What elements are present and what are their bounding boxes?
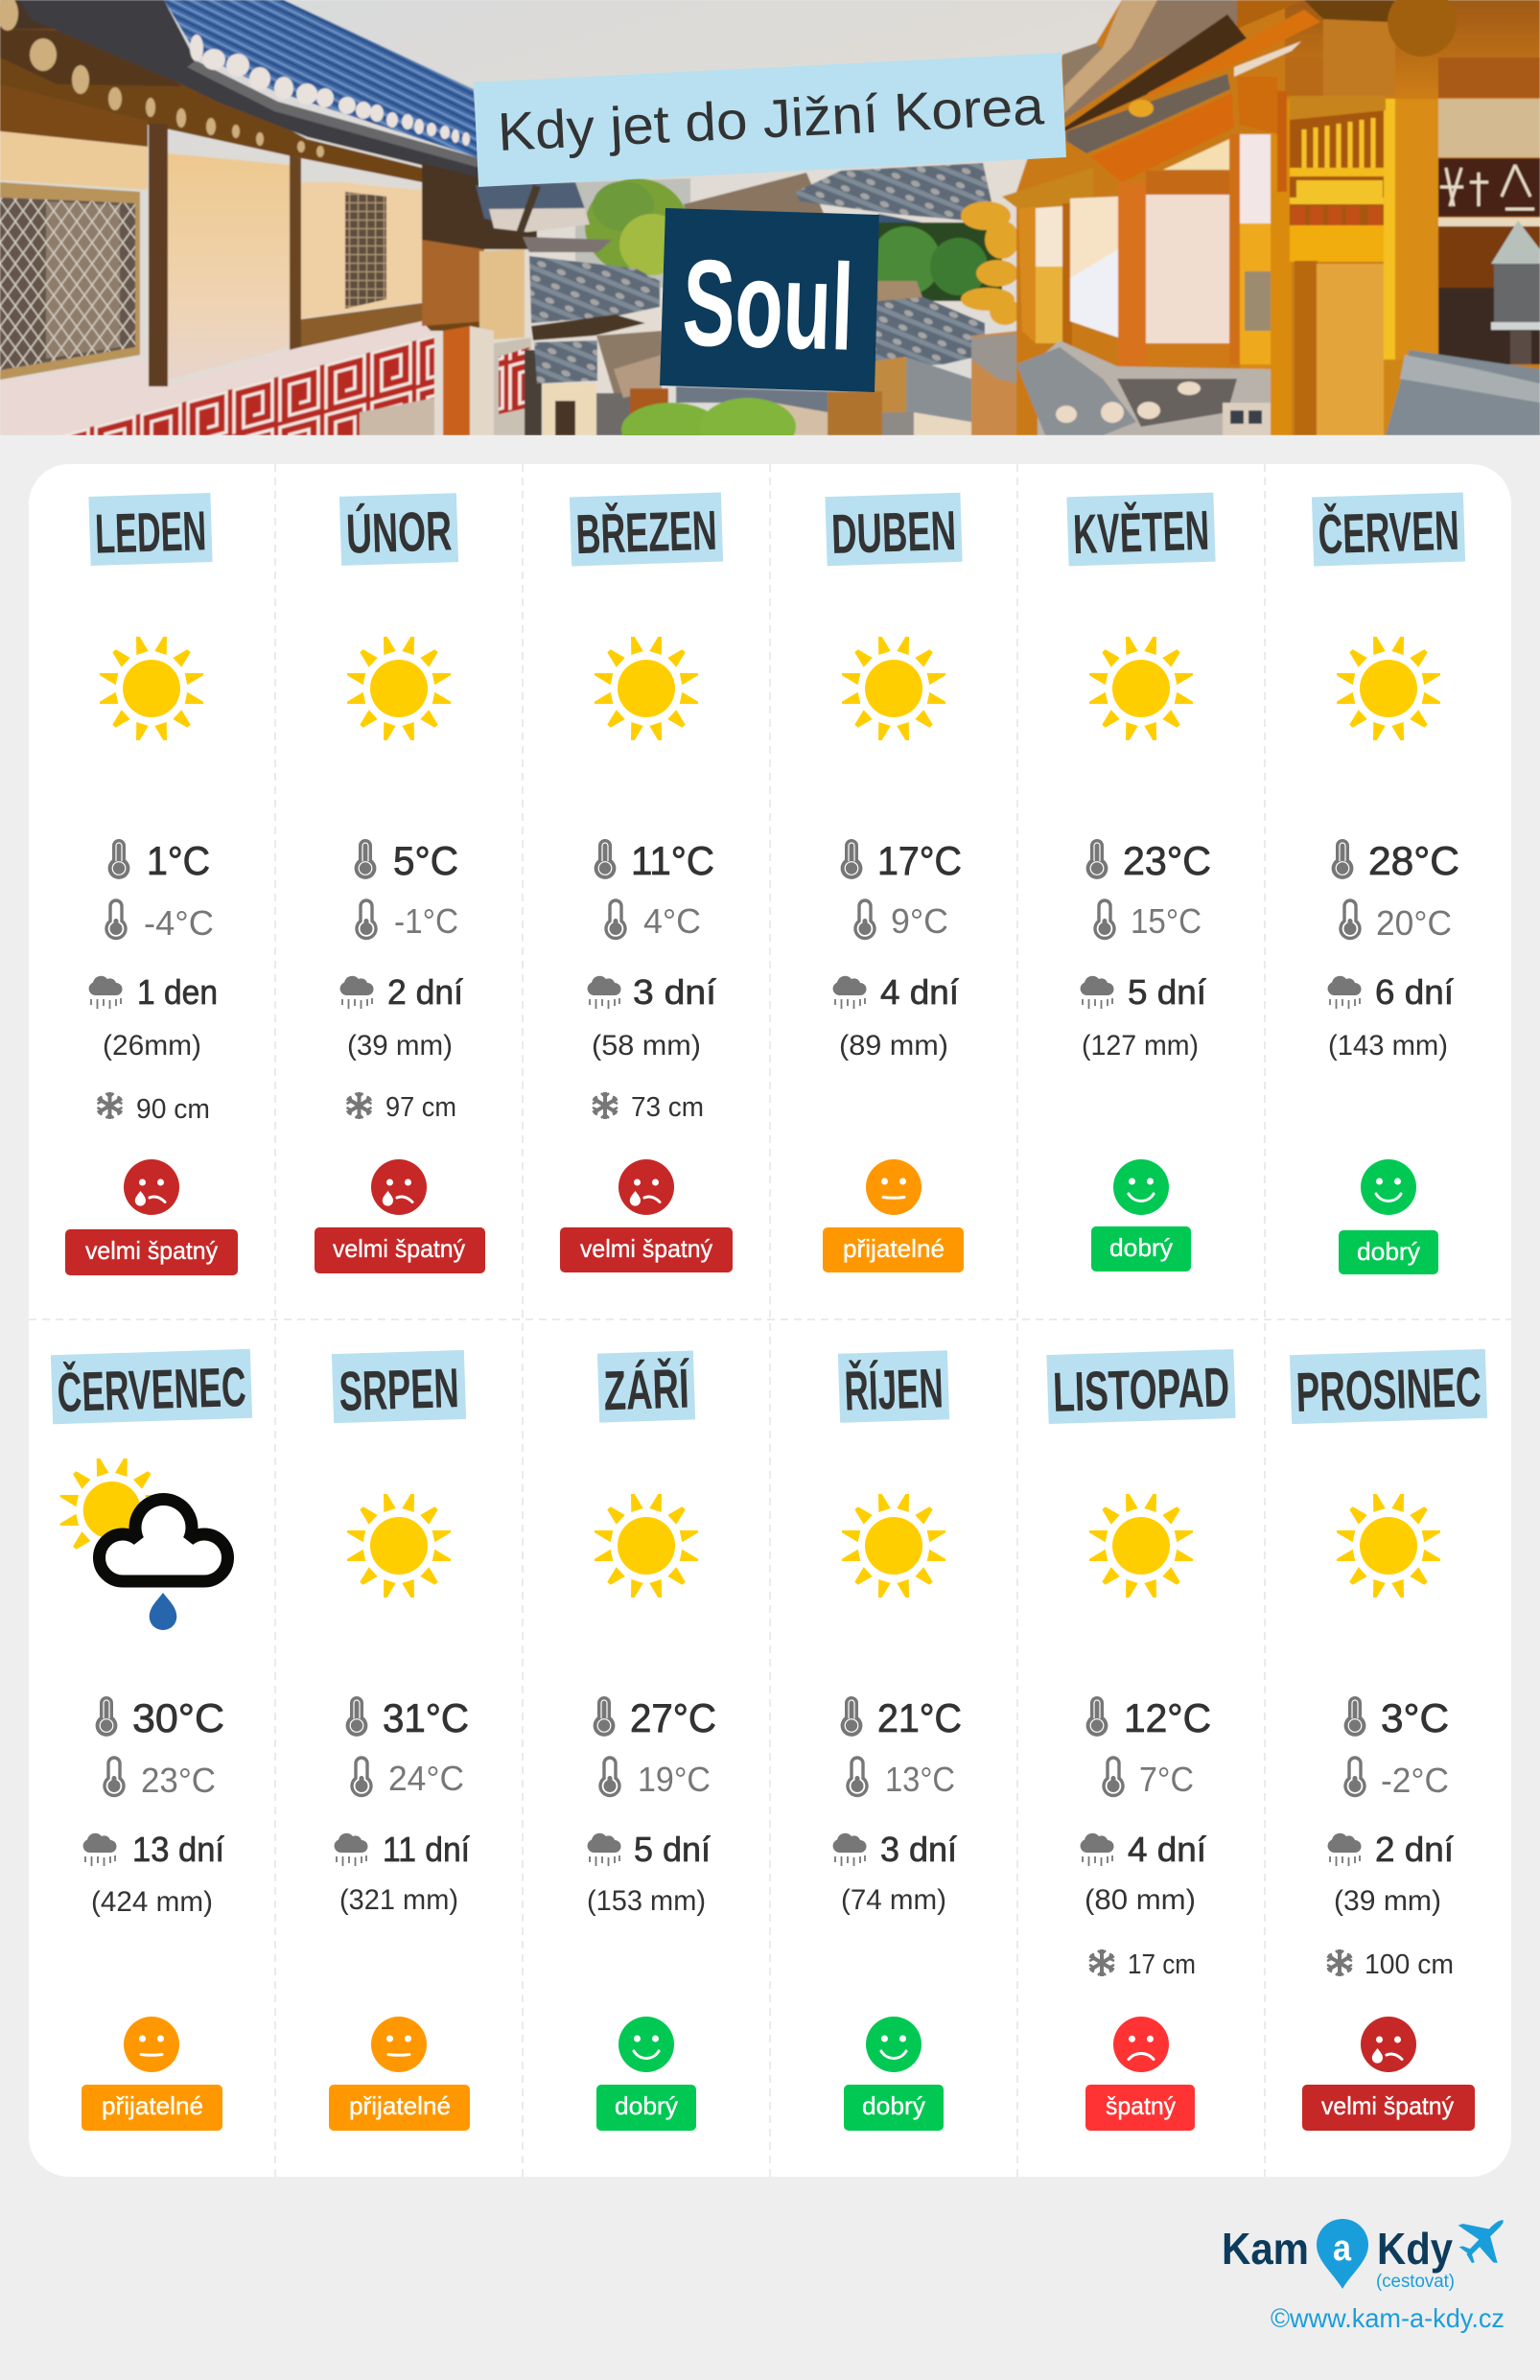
logo word: Kdy: Kdy [1377,2224,1453,2274]
min temperature: 4°C [643,901,701,941]
icon: thermometer high [595,839,616,879]
rating badge: dobrý [1357,1237,1420,1266]
rating badge: přijatelné [102,2091,203,2120]
logo word: Kam: Kam [1222,2224,1309,2274]
icon: thermometer high [96,1696,117,1737]
rain days: 1 den [137,972,218,1012]
icon: thermometer high [1086,839,1108,879]
title text: Kdy jet do Jižní Korea [497,75,1046,162]
icon: rating face [124,2017,179,2072]
min temperature: 24°C [388,1759,464,1798]
heading: červenec [51,1349,252,1424]
heading: červen [1312,493,1465,566]
month: červen [1312,493,1465,1274]
snow depth: 97 cm [385,1092,456,1123]
min temperature: 19°C [638,1760,711,1799]
rating badge [1339,1230,1438,1274]
max temperature: 3°C [1381,1695,1449,1740]
icon: thermometer high [355,839,376,879]
rain days: 3 dní [880,1830,957,1869]
month: květen [1066,493,1216,1272]
rating badge: velmi špatný [85,1236,218,1265]
month: říjen [833,1350,962,2131]
rainfall: (153 mm) [587,1885,706,1917]
icon: rating face [1361,2017,1416,2072]
month: duben [823,493,964,1272]
rating badge: přijatelné [349,2091,451,2120]
max temperature: 12°C [1124,1695,1211,1740]
icon: rating face [371,2017,427,2072]
icon: sun [347,637,451,740]
month: září [587,1350,716,2131]
icon: thermometer low [855,900,875,938]
rain days: 4 dní [880,972,959,1012]
icon: thermometer low [105,1758,124,1795]
left walls and windows [0,123,434,435]
blue tile roof [20,0,479,179]
panel: months grid [29,464,1511,2177]
heading: březen: BŘEZEN [575,500,718,566]
icon: map pin [1317,2219,1368,2289]
rain days: 2 dní [1375,1830,1454,1869]
rating badge [82,2085,222,2131]
rainfall: (80 mm) [1085,1884,1196,1916]
icon: snow [1327,1949,1352,1976]
heading: říjen [838,1350,949,1423]
rain days: 11 dní [383,1830,470,1869]
icon: sun [595,1494,698,1598]
city name box [660,208,879,392]
max temperature: 5°C [393,838,458,883]
icon: thermometer high [1332,839,1353,879]
icon: rating face [371,1159,427,1215]
min temperature: 13°C [885,1760,955,1799]
rain days: 4 dní [1128,1830,1206,1869]
max temperature: 28°C [1368,838,1459,883]
snow depth: 90 cm [136,1094,210,1125]
heading: květen: KVĚTEN [1072,500,1210,566]
icon: thermometer low [106,900,126,938]
heading: duben: DUBEN [830,500,957,566]
icon: sun [1337,1494,1440,1598]
rating badge: velmi špatný [580,1234,712,1263]
max temperature: 21°C [877,1695,962,1740]
icon: sun [100,637,203,740]
snow depth: 17 cm [1128,1949,1196,1980]
icon: rating face [618,1159,674,1215]
rating badge [844,2085,944,2131]
max temperature: 30°C [132,1695,224,1740]
rain days: 2 dní [387,972,463,1012]
min temperature: 20°C [1376,903,1452,943]
city name: Soul [681,234,855,377]
icon: snow [593,1092,618,1119]
icon: rain [335,1833,368,1866]
logo: Kam a Kdy [1222,2219,1505,2333]
rainfall: (89 mm) [839,1030,948,1062]
icon: thermometer low [600,1758,619,1795]
icon: rating face [1113,2017,1169,2072]
heading: listopad: LISTOPAD [1052,1356,1230,1424]
upper timber [1285,0,1540,99]
min temperature: 15°C [1131,901,1202,941]
icon: rain [833,976,867,1009]
icon: thermometer low [357,900,376,938]
month: leden [65,493,238,1275]
heading: září: ZÁŘÍ [603,1358,691,1422]
icon: airplane [1458,2220,1504,2263]
max temperature: 23°C [1123,838,1211,883]
month: listopad [1046,1349,1236,2131]
heading: leden: LEDEN [94,500,207,566]
rainfall: (39 mm) [347,1030,453,1062]
month: červenec [51,1349,252,2131]
month: prosinec [1290,1349,1487,2131]
rating badge: velmi špatný [333,1234,465,1263]
heading: březen [570,493,723,566]
icon: thermometer low [1095,900,1114,938]
rating badge [560,1227,733,1272]
rating badge: dobrý [615,2091,678,2120]
heading: listopad [1046,1349,1236,1424]
icon: sun [1089,1494,1193,1598]
icon: rain [89,976,123,1009]
icon: rating face [1113,1159,1169,1215]
heading: říjen: ŘÍJEN [844,1357,945,1423]
rain days: 6 dní [1375,972,1454,1012]
icon: rain [588,976,621,1009]
rating badge: dobrý [862,2091,925,2120]
rating badge [1302,2085,1475,2131]
max temperature: 11°C [631,838,714,883]
icon: rain [1328,976,1362,1009]
icon: thermometer low [352,1758,371,1795]
heading: únor [339,493,458,566]
min temperature: -2°C [1381,1761,1449,1800]
title banner [474,53,1066,187]
rain days: 13 dní [132,1830,224,1869]
heading: květen [1066,493,1216,566]
rainfall: (321 mm) [339,1884,458,1916]
icon: thermometer high [841,1696,862,1737]
min temperature: -4°C [144,903,214,943]
eaves and beams [1064,0,1239,121]
max temperature: 31°C [383,1695,469,1740]
back roofs [683,162,992,224]
icon: rating face [866,2017,922,2072]
rating badge [329,2085,470,2131]
rating badge [1091,1226,1191,1272]
right bay [1438,99,1540,157]
icon: rain [833,1833,867,1866]
right hanok building [1002,0,1540,435]
snow depth: 100 cm [1365,1949,1454,1980]
narrow lane and door [422,163,542,435]
icon: rain [83,1833,117,1866]
icon: sun [842,1494,945,1598]
right trees [872,201,1020,325]
rain days: 5 dní [634,1830,711,1869]
rating badge [315,1227,485,1273]
rainfall: (74 mm) [841,1884,946,1916]
icon: sun [1089,637,1193,740]
icon: thermometer high [594,1696,615,1737]
rating badge: přijatelné [843,1234,945,1263]
icon: thermometer high [108,839,129,879]
icon: snow [347,1092,372,1119]
rain days: 5 dní [1128,972,1206,1012]
heading: červenec: ČERVENEC [57,1356,247,1424]
rating badge: dobrý [1109,1233,1173,1262]
rating badge: špatný [1106,2091,1176,2120]
lantern [1491,221,1540,264]
rating badge: velmi špatný [1321,2091,1454,2120]
icon: sun [842,637,945,740]
icon: rain [1081,1833,1114,1866]
icon: thermometer high [1086,1696,1108,1737]
heading: srpen: SRPEN [338,1357,460,1423]
central lane: tree, roofs and small houses [476,178,690,435]
icon: rain [340,976,374,1009]
min temperature: 9°C [891,901,948,941]
rating badge [823,1227,964,1272]
icon: thermometer low [848,1758,867,1795]
left wood structure [0,0,479,331]
icon: sun [1337,637,1440,740]
rainfall: (424 mm) [91,1886,213,1918]
max temperature: 1°C [147,838,210,883]
heading: září [597,1350,695,1423]
snow depth: 73 cm [631,1092,704,1123]
rainfall: (26mm) [103,1030,201,1062]
icon: rain [588,1833,621,1866]
icon: snow [1089,1949,1114,1976]
icon: map pin: a [1333,2228,1352,2269]
rain days: 3 dní [633,972,716,1012]
icon: thermometer low [1345,1758,1365,1795]
max temperature: 17°C [877,838,962,883]
month: únor [315,493,485,1273]
min temperature: -1°C [394,901,458,941]
max temperature: 27°C [630,1695,716,1740]
heading: duben [825,493,963,566]
rainfall: (58 mm) [592,1030,701,1062]
icon: rating face [866,1159,922,1215]
icon: rain [1081,976,1114,1009]
icon: rating face [1361,1159,1416,1215]
heading: únor: ÚNOR [345,500,453,566]
min temperature: 23°C [141,1761,216,1800]
icon: sun [347,1494,451,1598]
icon: rating face [124,1159,179,1215]
month: srpen [329,1350,470,2131]
icon: thermometer low [606,900,625,938]
icon: thermometer high [346,1696,367,1737]
month: březen [560,493,733,1272]
icon: thermometer low [1104,1758,1123,1795]
heading: srpen [332,1350,466,1423]
right lower roofs [620,280,1018,435]
rating badge [1085,2085,1195,2131]
min temperature: 7°C [1139,1760,1194,1799]
rating badge [596,2085,696,2131]
icon: thermometer low [1341,900,1360,938]
website url: ©www.kam-a-kdy.cz [1271,2303,1505,2333]
icon: snow [98,1092,123,1119]
rainfall: (143 mm) [1328,1030,1448,1062]
hero photo: traditional hanok street [0,0,1540,456]
icon: rating face [618,2017,674,2072]
rainfall: (127 mm) [1082,1030,1199,1062]
rating badge [65,1229,238,1275]
stone walls [1386,350,1540,435]
rainfall: (39 mm) [1334,1885,1441,1917]
icon: sun behind rain cloud [60,1458,227,1630]
icon: sun [595,637,698,740]
icon: rain [1328,1833,1362,1866]
icon: thermometer high [841,839,862,879]
heading: leden [88,493,213,566]
logo subtitle: (cestovat) [1376,2272,1455,2292]
icon: thermometer high [1344,1696,1365,1737]
